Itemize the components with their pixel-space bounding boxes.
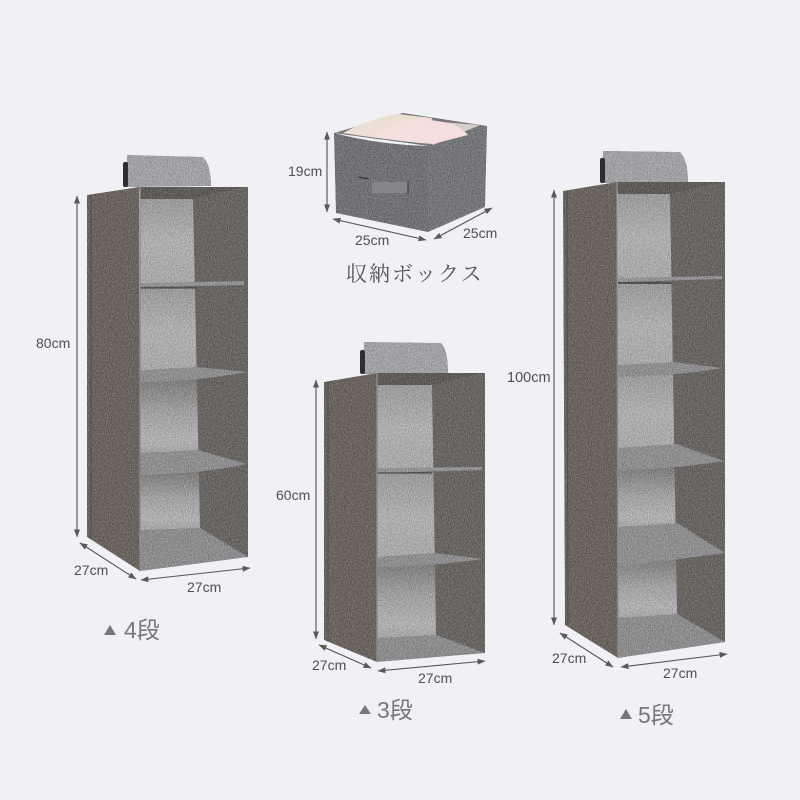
top handle — [363, 342, 448, 374]
side panel left strip — [327, 382, 329, 641]
shelf 3 — [617, 444, 724, 470]
width label: 27cm — [187, 579, 221, 595]
shelf 3 — [141, 450, 247, 475]
top handle — [126, 155, 211, 187]
side label: 25cm — [463, 225, 497, 241]
ceiling — [139, 187, 248, 199]
bottom floor — [377, 635, 485, 662]
pink towel — [370, 118, 468, 144]
front face — [334, 133, 429, 232]
right wall — [432, 373, 485, 653]
handle loop — [360, 350, 365, 374]
shelf 2 — [141, 367, 247, 382]
bottom floor — [140, 528, 248, 571]
bottom floor — [618, 614, 725, 658]
width dimension arrow — [141, 568, 250, 580]
box body — [334, 113, 487, 232]
depth dimension arrow — [560, 633, 613, 667]
box handle — [372, 182, 408, 193]
left side panel — [324, 373, 377, 662]
depth label: 27cm — [312, 657, 346, 673]
shelf 1 — [378, 467, 482, 473]
handle loop — [123, 162, 128, 187]
back inner rim — [334, 113, 487, 146]
front dimension arrow — [333, 219, 426, 240]
back wall compartment 2 — [377, 473, 437, 559]
back wall compartment 3 — [140, 378, 200, 455]
back wall compartment 3 — [377, 561, 439, 640]
shelf 1 — [618, 276, 722, 282]
back wall compartment 4 — [618, 466, 680, 530]
height label: 19cm — [288, 163, 322, 179]
width label: 27cm — [663, 665, 697, 681]
back wall compartment 1 — [618, 194, 674, 278]
width dimension arrow — [621, 654, 727, 667]
3-tier shelf unit — [276, 342, 485, 723]
storage box — [288, 113, 497, 286]
back wall compartment 2 — [140, 288, 198, 372]
caption 5段: 5段 — [638, 702, 674, 728]
side dimension arrow — [434, 208, 492, 239]
caption 3段: 3段 — [377, 697, 413, 723]
shelf 4 — [618, 523, 725, 567]
back wall base — [140, 190, 210, 535]
height label: 100cm — [507, 370, 551, 386]
depth dimension arrow — [319, 645, 371, 668]
caption 4段: 4段 — [124, 617, 160, 643]
front edge — [139, 187, 141, 571]
handle stitch — [358, 177, 369, 179]
back wall compartment 3 — [618, 373, 678, 450]
shelf 1 shadow — [141, 287, 196, 289]
left side panel — [87, 187, 140, 571]
beige towel — [343, 114, 432, 143]
height dimension arrow — [315, 380, 317, 639]
shelf 1 shadow — [618, 282, 672, 284]
shelf 2 — [617, 362, 723, 377]
shelf 1 — [141, 281, 244, 287]
back wall compartment 1 — [140, 199, 196, 283]
4-tier shelf unit — [36, 155, 250, 643]
fabric body of 4-tier unit — [87, 155, 248, 571]
5-tier shelf unit — [507, 151, 727, 728]
back wall compartment 5 — [618, 558, 680, 620]
right wall — [670, 182, 725, 642]
back wall base — [377, 376, 447, 638]
height dimension arrow — [76, 196, 78, 537]
right wall — [193, 187, 248, 557]
caption triangle — [104, 625, 116, 635]
side panel left strip — [567, 191, 568, 626]
height label: 60cm — [276, 487, 310, 503]
ceiling — [377, 373, 485, 385]
back wall compartment 4 — [140, 471, 202, 531]
depth dimension arrow — [80, 543, 136, 579]
height label: 80cm — [36, 335, 70, 351]
front edge — [376, 373, 378, 662]
back wall base — [618, 185, 688, 620]
width dimension arrow — [378, 661, 485, 671]
width label: 27cm — [418, 670, 452, 686]
ceiling — [617, 182, 725, 194]
right face — [428, 126, 487, 232]
caption triangle — [620, 709, 632, 719]
top handle — [602, 151, 688, 183]
height dimension arrow — [326, 132, 328, 212]
depth label: 27cm — [74, 562, 108, 578]
front label: 25cm — [355, 232, 389, 248]
grey-beige towel — [425, 122, 480, 145]
back wall compartment 1 — [377, 385, 435, 469]
shelf 2 — [377, 553, 483, 567]
depth label: 27cm — [552, 650, 586, 666]
side panel left strip — [90, 195, 92, 538]
caption triangle — [359, 705, 371, 714]
fabric body of 3-tier unit — [324, 342, 485, 662]
shelf 1 shadow — [378, 472, 432, 474]
handle end — [407, 181, 409, 194]
fabric body of 5-tier unit — [563, 151, 725, 658]
left side panel — [563, 182, 618, 658]
caption: 収納ボックス — [346, 262, 484, 286]
front edge — [617, 182, 618, 658]
back wall compartment 2 — [618, 284, 676, 367]
handle loop — [600, 158, 605, 183]
height dimension arrow — [553, 190, 555, 625]
